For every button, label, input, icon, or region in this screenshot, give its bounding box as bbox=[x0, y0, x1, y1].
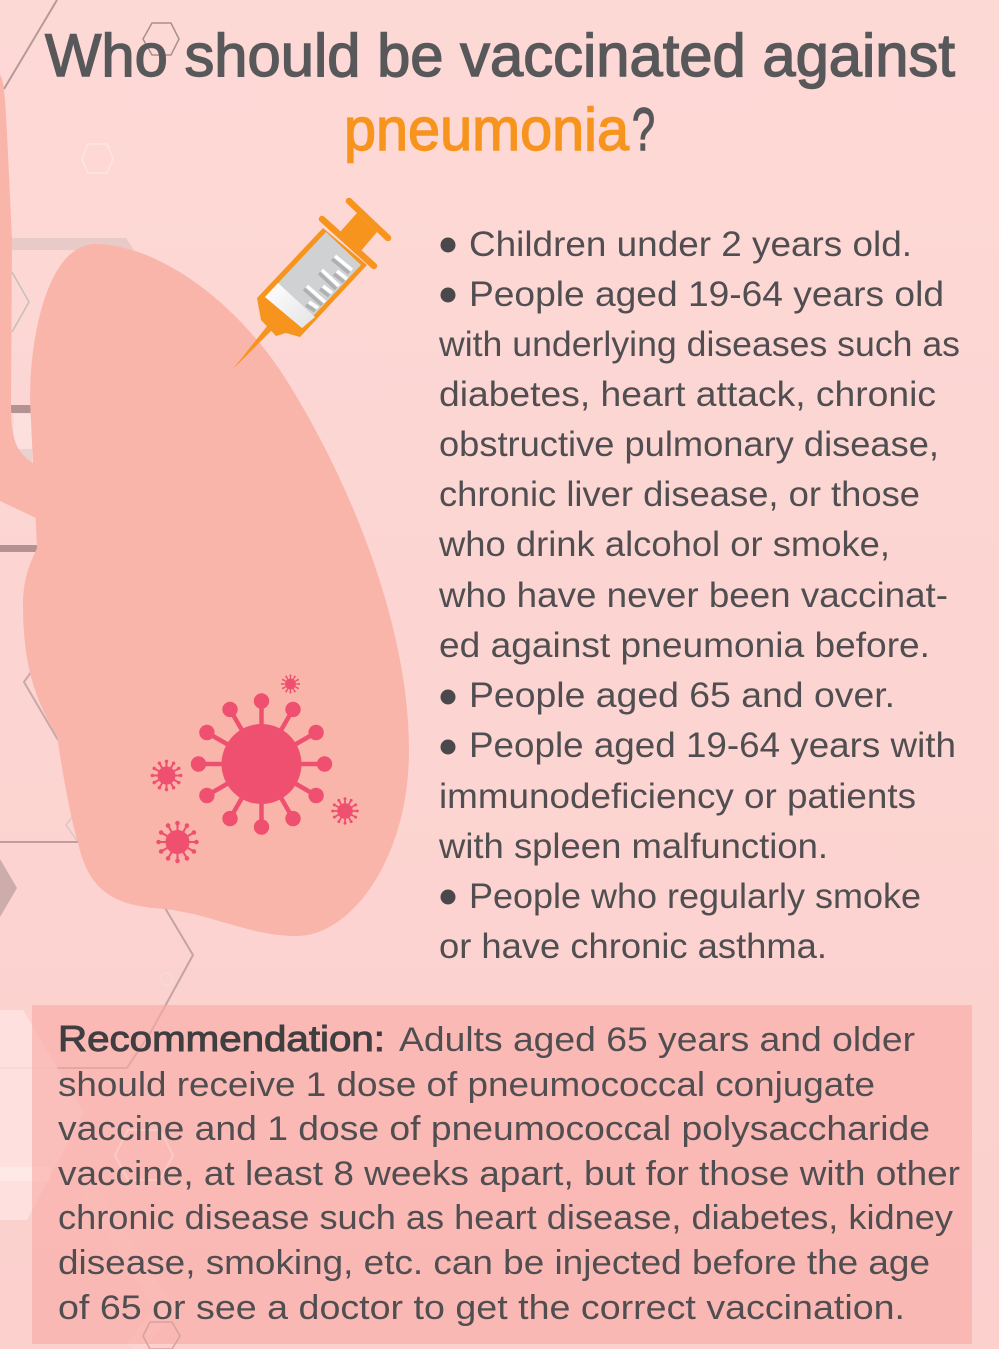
text block: who should be vaccinated list: People aged 65 and over. bbox=[469, 676, 895, 715]
text block: who should be vaccinated list: ed against pneumonia before. bbox=[439, 626, 930, 665]
large virus bbox=[191, 693, 332, 835]
small virus left bbox=[151, 760, 182, 791]
text block: recommendation bbox=[58, 1018, 960, 1327]
text block: who should be vaccinated list: diabetes, heart attack, chronic bbox=[439, 375, 936, 414]
background hexagon pattern bbox=[0, 0, 193, 1349]
small virus lower left bbox=[156, 821, 199, 863]
illustration: lungs bbox=[0, 75, 409, 936]
title: ? bbox=[632, 96, 655, 163]
text block: who should be vaccinated list: chronic liver disease, or those bbox=[439, 475, 920, 514]
text block: recommendation: should receive 1 dose of pneumococcal conjugate bbox=[58, 1066, 875, 1104]
text block: who should be vaccinated list: People aged 19-64 years old bbox=[469, 275, 944, 314]
text block: who should be vaccinated list: obstructive pulmonary disease, bbox=[439, 425, 939, 464]
text block: recommendation: Recommendation: bbox=[58, 1018, 385, 1059]
small hexagons over recommendation panel bbox=[115, 1130, 180, 1349]
panel: recommendation background bbox=[32, 1005, 972, 1344]
text block: who should be vaccinated list: who drink alcohol or smoke, bbox=[438, 525, 890, 564]
text block: who should be vaccinated list bbox=[438, 225, 960, 966]
text block: who should be vaccinated list: Children under 2 years old. bbox=[469, 225, 912, 264]
icon: syringe bbox=[233, 201, 388, 369]
title bbox=[45, 22, 955, 163]
text block: who should be vaccinated list: with spleen malfunction. bbox=[438, 827, 828, 866]
small virus upper bbox=[281, 674, 300, 694]
text block: who should be vaccinated list: or have chronic asthma. bbox=[439, 927, 827, 966]
text block: recommendation: disease, smoking, etc. can be injected before the age bbox=[58, 1244, 930, 1282]
icon: viruses bbox=[151, 674, 359, 863]
text block: who should be vaccinated list: People aged 19-64 years with bbox=[469, 726, 956, 765]
text block: recommendation: Adults aged 65 years and older bbox=[399, 1021, 915, 1059]
text block: who should be vaccinated list: who have never been vaccinat- bbox=[438, 576, 948, 615]
text block: recommendation: vaccine and 1 dose of pneumococcal polysaccharide bbox=[58, 1110, 930, 1148]
title: pneumonia bbox=[344, 96, 630, 163]
windpipe and bronchus bbox=[0, 75, 36, 518]
text block: recommendation: vaccine, at least 8 weeks apart, but for those with other bbox=[58, 1155, 960, 1193]
small virus right bbox=[331, 797, 359, 825]
lung bbox=[23, 244, 409, 936]
text block: recommendation: chronic disease such as heart disease, diabetes, kidney bbox=[58, 1199, 953, 1237]
text block: recommendation: of 65 or see a doctor to get the correct vaccination. bbox=[58, 1289, 905, 1327]
text block: who should be vaccinated list: immunodeficiency or patients bbox=[439, 777, 916, 816]
title: Who should be vaccinated against bbox=[45, 22, 955, 89]
text block: who should be vaccinated list: with underlying diseases such as bbox=[438, 325, 960, 364]
text block: who should be vaccinated list: People who regularly smoke bbox=[469, 877, 921, 916]
